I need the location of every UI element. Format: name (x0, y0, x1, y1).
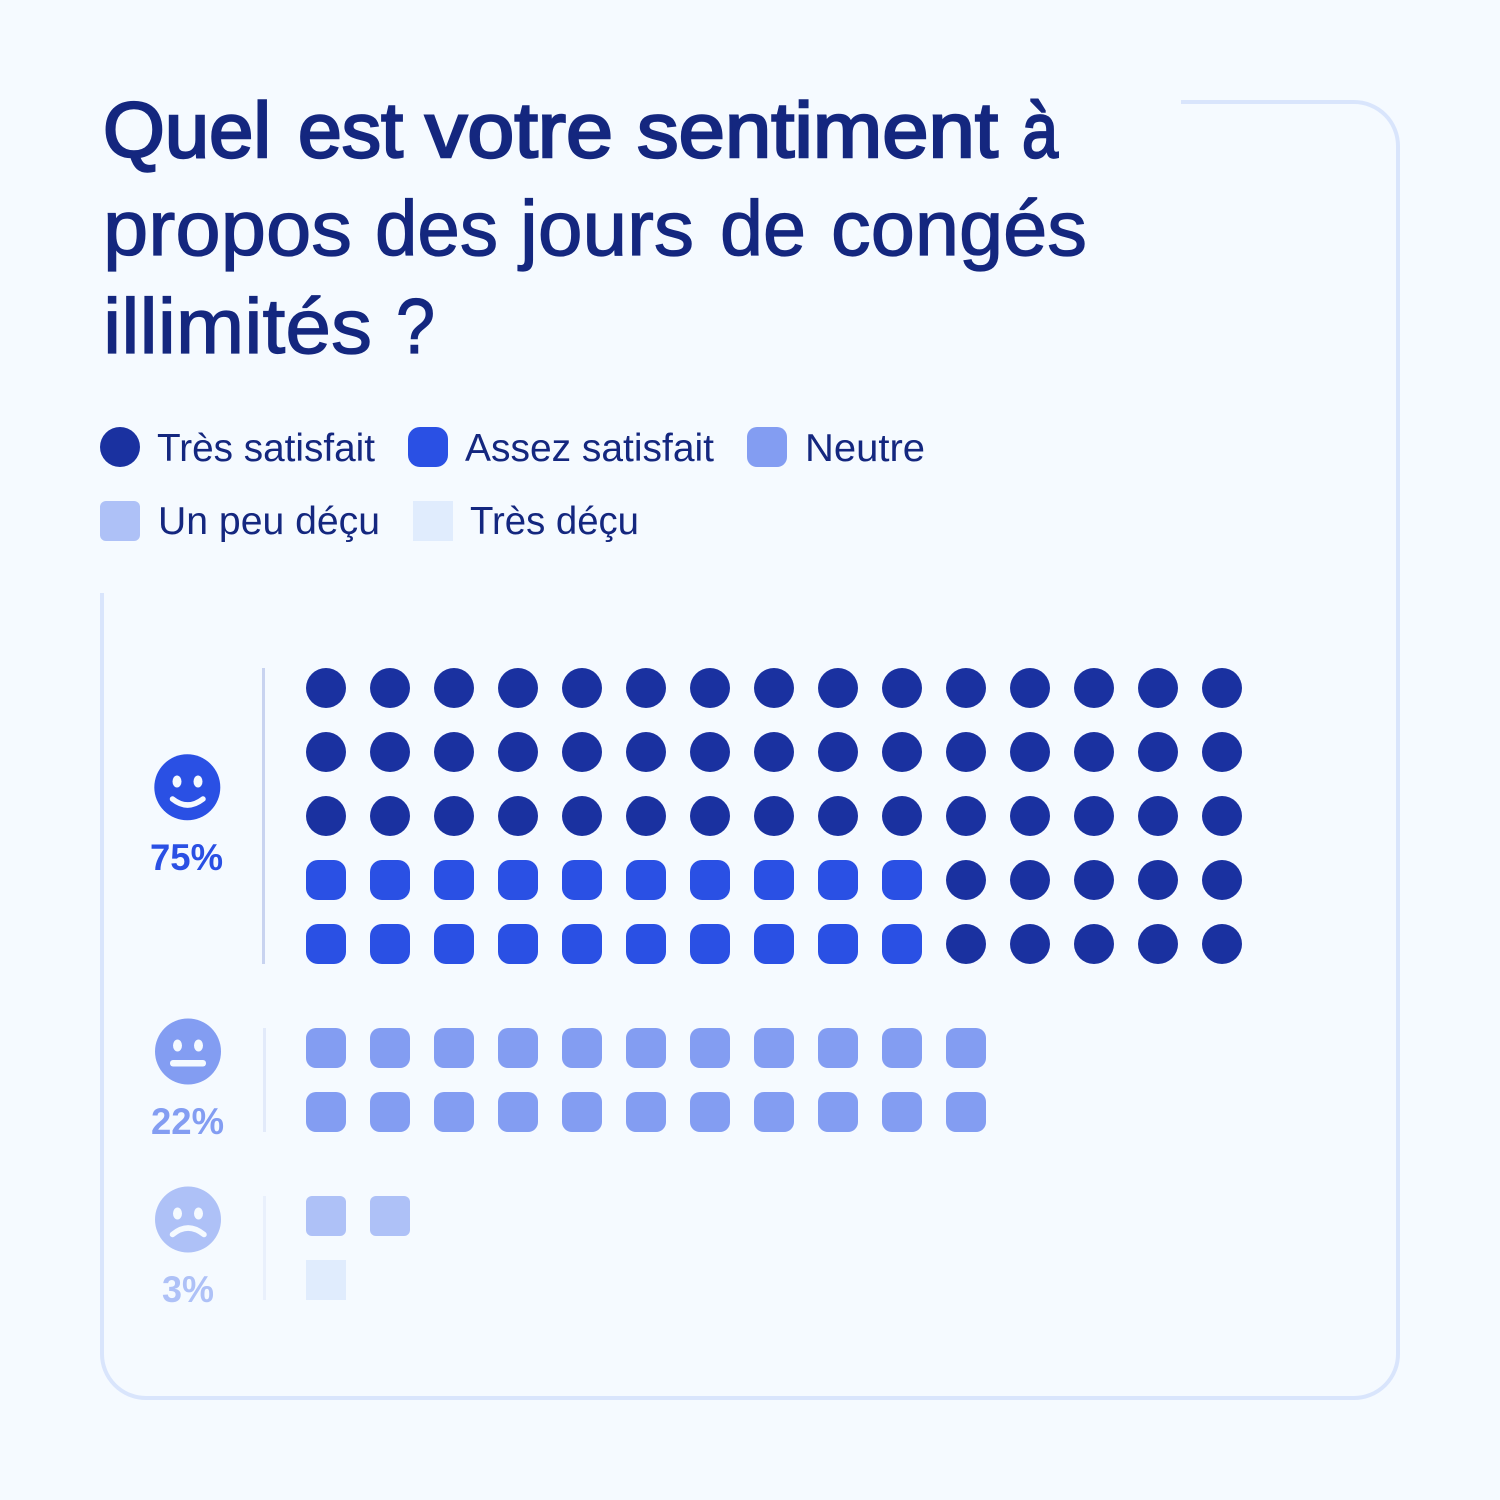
legend item: Assez satisfait: Assez satisfait (465, 427, 714, 470)
title (103, 86, 1087, 370)
legend item: Neutre (747, 427, 925, 470)
percentage: 22%: 22% (151, 1101, 224, 1142)
icon: neutral face (155, 1018, 221, 1084)
group: disappointed 3% (155, 1186, 410, 1310)
panel frame (102, 102, 1398, 1398)
title: ? (396, 282, 435, 370)
percentage: 75%: 75% (150, 837, 223, 878)
title: congés (831, 184, 1087, 272)
percentage: 3%: 3% (162, 1269, 214, 1310)
icon: smiling face (154, 754, 220, 820)
divider (263, 1196, 266, 1300)
square grid: 3% (306, 1196, 410, 1300)
legend item: Très déçu: Très déçu (470, 500, 639, 543)
title: est (298, 86, 403, 174)
legend item: Un peu déçu: Un peu déçu (158, 500, 380, 543)
dot grid: 75% (306, 668, 1242, 964)
divider (262, 668, 265, 964)
title: de (720, 184, 806, 272)
legend (100, 427, 925, 543)
title: votre (425, 86, 613, 174)
legend item: Neutre: Neutre (805, 427, 925, 470)
title: jours (518, 184, 694, 272)
title: à (1022, 86, 1059, 174)
title: Quel (103, 86, 271, 174)
group: neutral 22% (151, 1018, 986, 1142)
square grid: 22% (306, 1028, 986, 1132)
icon: sad face (155, 1186, 221, 1252)
title: propos (103, 184, 352, 272)
legend item: Très satisfait: Très satisfait (157, 427, 375, 470)
title: sentiment (637, 86, 998, 174)
group: satisfied 75% (150, 668, 1242, 964)
divider (263, 1028, 266, 1132)
title: illimités (103, 282, 372, 370)
title: des (375, 184, 498, 272)
